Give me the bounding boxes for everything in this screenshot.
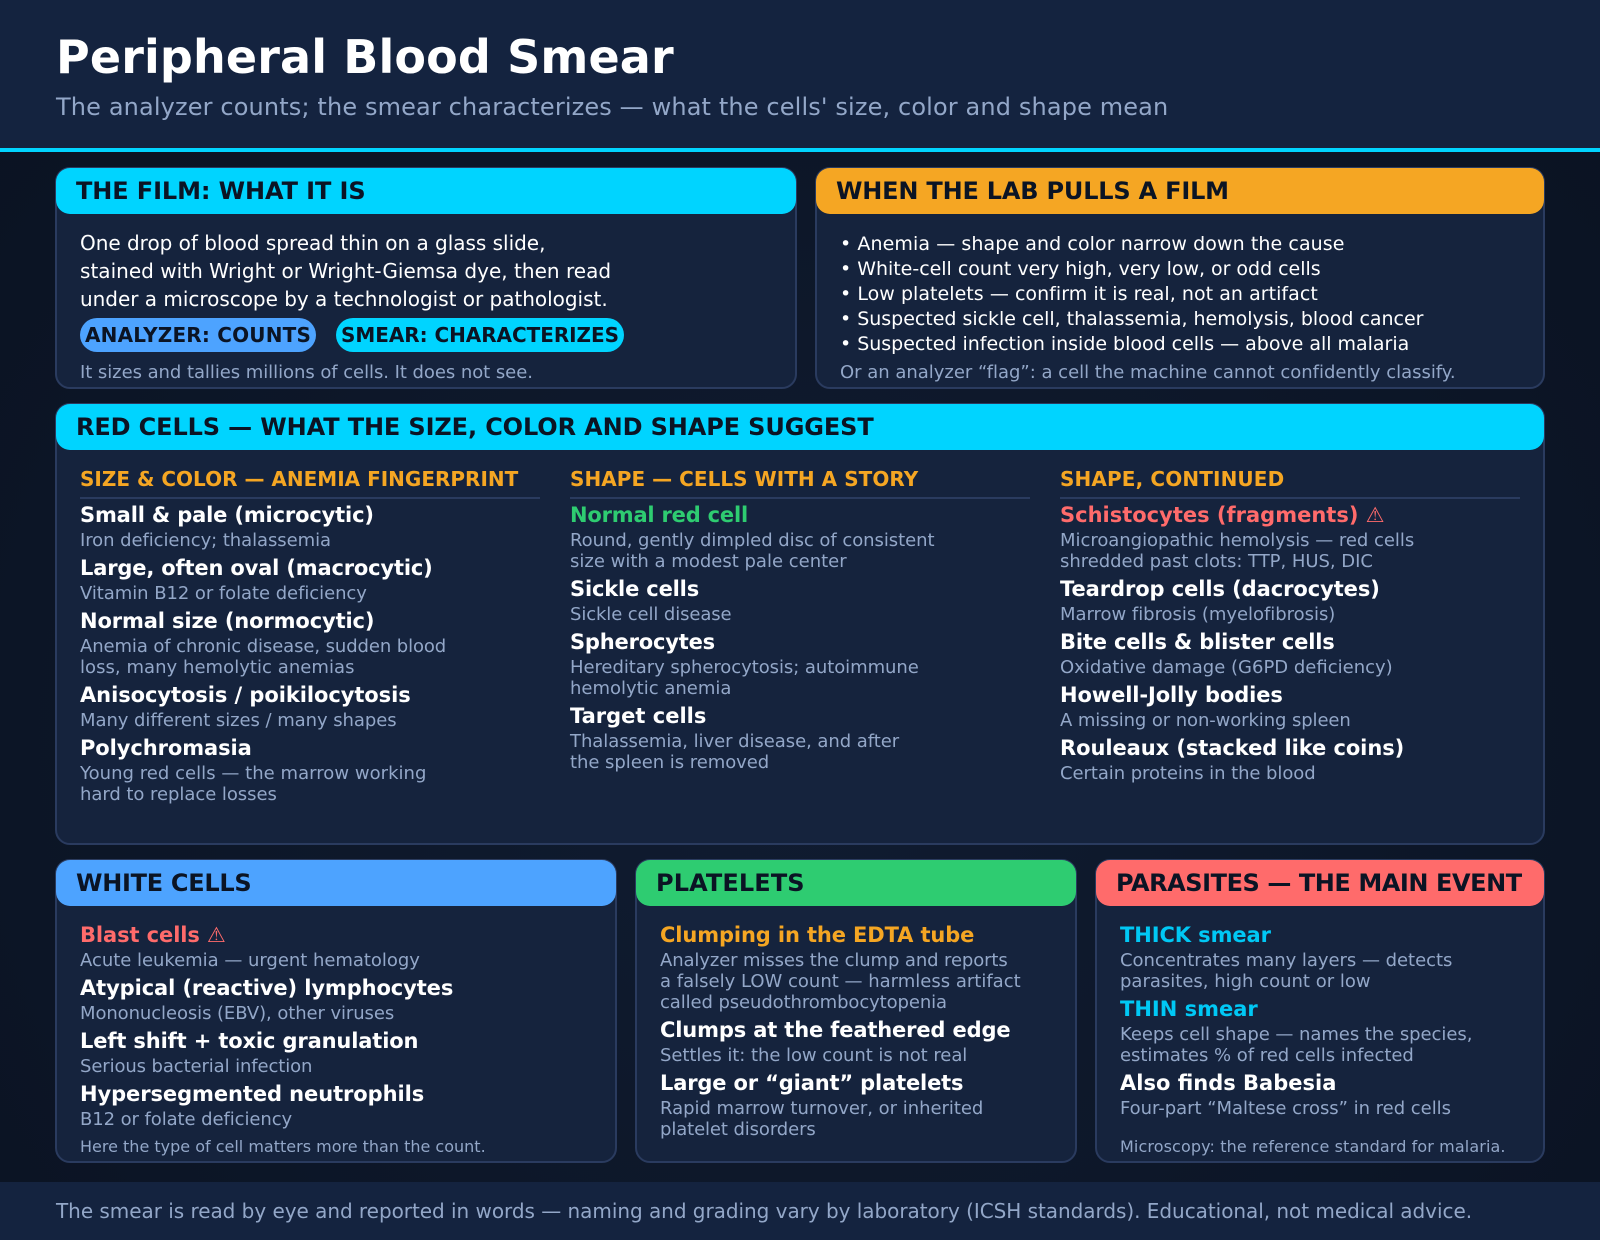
heading: when the lab pulls a film: WHEN THE LAB PULLS A FILM <box>836 177 1229 205</box>
panel: platelets <box>635 859 1077 1163</box>
column: shape: Sickle cell disease <box>570 604 732 625</box>
platelet list: Clumping in the EDTA tube <box>660 923 974 947</box>
column: shape: Spherocytes <box>570 630 715 654</box>
white cell list: Left shift + toxic granulation <box>80 1029 418 1053</box>
platelet list: Rapid marrow turnover, or inherited <box>660 1098 983 1119</box>
film description: One drop of blood spread thin on a glass slide, <box>80 231 545 255</box>
column: shape continued: Certain proteins in the blood <box>1060 763 1316 784</box>
column: shape continued: Bite cells & blister cells <box>1060 630 1335 654</box>
column: size and color: Young red cells — the marrow working <box>80 763 426 784</box>
column: shape: size with a modest pale center <box>570 551 847 572</box>
column: shape continued: Microangiopathic hemolysis — red cells <box>1060 530 1414 551</box>
column: size and color: Many different sizes / many shapes <box>80 710 397 731</box>
pill: smear: SMEAR: CHARACTERIZES <box>341 323 619 347</box>
parasite list: Also finds Babesia <box>1120 1071 1336 1095</box>
white cell list: Blast cells ⚠ <box>80 923 226 947</box>
column: shape continued: shredded past clots: TTP, HUS, DIC <box>1060 551 1373 572</box>
film description: stained with Wright or Wright-Giemsa dye, then read <box>80 259 611 283</box>
white cell list: Acute leukemia — urgent hematology <box>80 950 420 971</box>
platelet list: Large or “giant” platelets <box>660 1071 963 1095</box>
column: size and color: Iron deficiency; thalassemia <box>80 530 331 551</box>
heading: the film <box>56 168 796 214</box>
column: shape: SHAPE — CELLS WITH A STORY <box>570 467 918 491</box>
platelet list: Clumps at the feathered edge <box>660 1018 1010 1042</box>
column: shape <box>570 467 1030 773</box>
heading: platelets: PLATELETS <box>656 869 805 897</box>
panel: the film <box>55 167 797 389</box>
bullet list: • Low platelets — confirm it is real, not an artifact <box>840 283 1318 305</box>
parasite note: Microscopy: the reference standard for malaria. <box>1120 1137 1506 1156</box>
column: size and color: Large, often oval (macrocytic) <box>80 556 433 580</box>
parasite list: Keeps cell shape — names the species, <box>1120 1024 1472 1045</box>
platelet list <box>660 923 1021 1140</box>
column: shape continued: Oxidative damage (G6PD deficiency) <box>1060 657 1393 678</box>
column: size and color: Small & pale (microcytic) <box>80 503 374 527</box>
heading: red cells <box>56 404 1544 450</box>
heading: red cells: RED CELLS — WHAT THE SIZE, COLOR AND SHAPE SUGGEST <box>76 413 874 441</box>
heading: platelets <box>636 860 1076 906</box>
parasite list: THIN smear <box>1120 997 1258 1021</box>
heading: parasites: PARASITES — THE MAIN EVENT <box>1116 869 1522 897</box>
column: size and color: Vitamin B12 or folate deficiency <box>80 583 367 604</box>
footer <box>0 1182 1600 1240</box>
parasite list: parasites, high count or low <box>1120 971 1371 992</box>
white cell list: Atypical (reactive) lymphocytes <box>80 976 453 1000</box>
column: size and color: SIZE & COLOR — ANEMIA FINGERPRINT <box>80 467 518 491</box>
platelet list: platelet disorders <box>660 1119 816 1140</box>
column: shape continued: A missing or non-working spleen <box>1060 710 1351 731</box>
column: shape: Sickle cells <box>570 577 699 601</box>
bullet list: • White-cell count very high, very low, or odd cells <box>840 258 1321 280</box>
column: shape: Normal red cell <box>570 503 748 527</box>
pill: smear <box>336 318 624 352</box>
parasite list: THICK smear <box>1120 923 1271 947</box>
heading: the film: THE FILM: WHAT IT IS <box>76 177 366 205</box>
white cell list: Hypersegmented neutrophils <box>80 1082 424 1106</box>
column: size and color: Anemia of chronic disease, sudden blood <box>80 636 446 657</box>
column: size and color <box>80 467 540 805</box>
heading: white cells: WHITE CELLS <box>76 869 251 897</box>
panel: red cells <box>55 403 1545 845</box>
column: shape: Round, gently dimpled disc of consistent <box>570 530 935 551</box>
header band <box>0 0 1600 152</box>
flag note: Or an analyzer “flag”: a cell the machine cannot confidently classify. <box>840 362 1456 383</box>
platelet list: a falsely LOW count — harmless artifact <box>660 971 1021 992</box>
panel: when the lab pulls a film <box>815 167 1545 389</box>
column: shape: Target cells <box>570 704 706 728</box>
film description: under a microscope by a technologist or pathologist. <box>80 287 608 311</box>
column: size and color: hard to replace losses <box>80 784 277 805</box>
white cell list: Serious bacterial infection <box>80 1056 312 1077</box>
heading: white cells <box>56 860 616 906</box>
column: shape: Thalassemia, liver disease, and after <box>570 731 899 752</box>
white cell list: Mononucleosis (EBV), other viruses <box>80 1003 394 1024</box>
column: shape continued: Howell-Jolly bodies <box>1060 683 1283 707</box>
film description <box>80 231 611 311</box>
bullet list <box>840 233 1424 355</box>
pill: analyzer <box>80 318 316 352</box>
heading: parasites <box>1096 860 1544 906</box>
column: shape: the spleen is removed <box>570 752 769 773</box>
column: shape continued <box>1060 467 1520 784</box>
title: Peripheral Blood Smear <box>56 30 674 84</box>
parasite list: estimates % of red cells infected <box>1120 1045 1414 1066</box>
platelet list: Settles it: the low count is not real <box>660 1045 967 1066</box>
column: size and color: Polychromasia <box>80 736 252 760</box>
white cell note: Here the type of cell matters more than the count. <box>80 1137 486 1156</box>
column: shape continued: Schistocytes (fragments) ⚠ <box>1060 503 1385 527</box>
column: size and color: loss, many hemolytic anemias <box>80 657 354 678</box>
bullet list: • Anemia — shape and color narrow down the cause <box>840 233 1345 255</box>
subtitle: The analyzer counts; the smear characterizes — what the cells' size, color and shape mean <box>56 93 1168 121</box>
column: shape: Hereditary spherocytosis; autoimmune <box>570 657 919 678</box>
bullet list: • Suspected infection inside blood cells — above all malaria <box>840 333 1409 355</box>
column: size and color: Normal size (normocytic) <box>80 609 374 633</box>
footer: The smear is read by eye and reported in words — naming and grading vary by laboratory (ICSH standards). Educational, not medical advice. <box>56 1199 1472 1223</box>
parasite list: Concentrates many layers — detects <box>1120 950 1452 971</box>
column: shape: hemolytic anemia <box>570 678 731 699</box>
heading: when the lab pulls a film <box>816 168 1544 214</box>
white cell list: B12 or folate deficiency <box>80 1109 292 1130</box>
white cell list <box>80 923 453 1130</box>
column: shape continued: Teardrop cells (dacrocytes) <box>1060 577 1380 601</box>
parasite list <box>1120 923 1472 1119</box>
panel: parasites <box>1095 859 1545 1163</box>
parasite list: Four-part “Maltese cross” in red cells <box>1120 1098 1451 1119</box>
platelet list: Analyzer misses the clump and reports <box>660 950 1008 971</box>
bullet list: • Suspected sickle cell, thalassemia, hemolysis, blood cancer <box>840 308 1423 330</box>
column: shape continued: Rouleaux (stacked like coins) <box>1060 736 1404 760</box>
column: shape continued: Marrow fibrosis (myelofibrosis) <box>1060 604 1335 625</box>
platelet list: called pseudothrombocytopenia <box>660 992 947 1013</box>
panel: white cells <box>55 859 617 1163</box>
column: shape continued: SHAPE, CONTINUED <box>1060 467 1284 491</box>
column: size and color: Anisocytosis / poikilocytosis <box>80 683 411 707</box>
film note: It sizes and tallies millions of cells. It does not see. <box>80 362 533 383</box>
pill: analyzer: ANALYZER: COUNTS <box>85 323 311 347</box>
